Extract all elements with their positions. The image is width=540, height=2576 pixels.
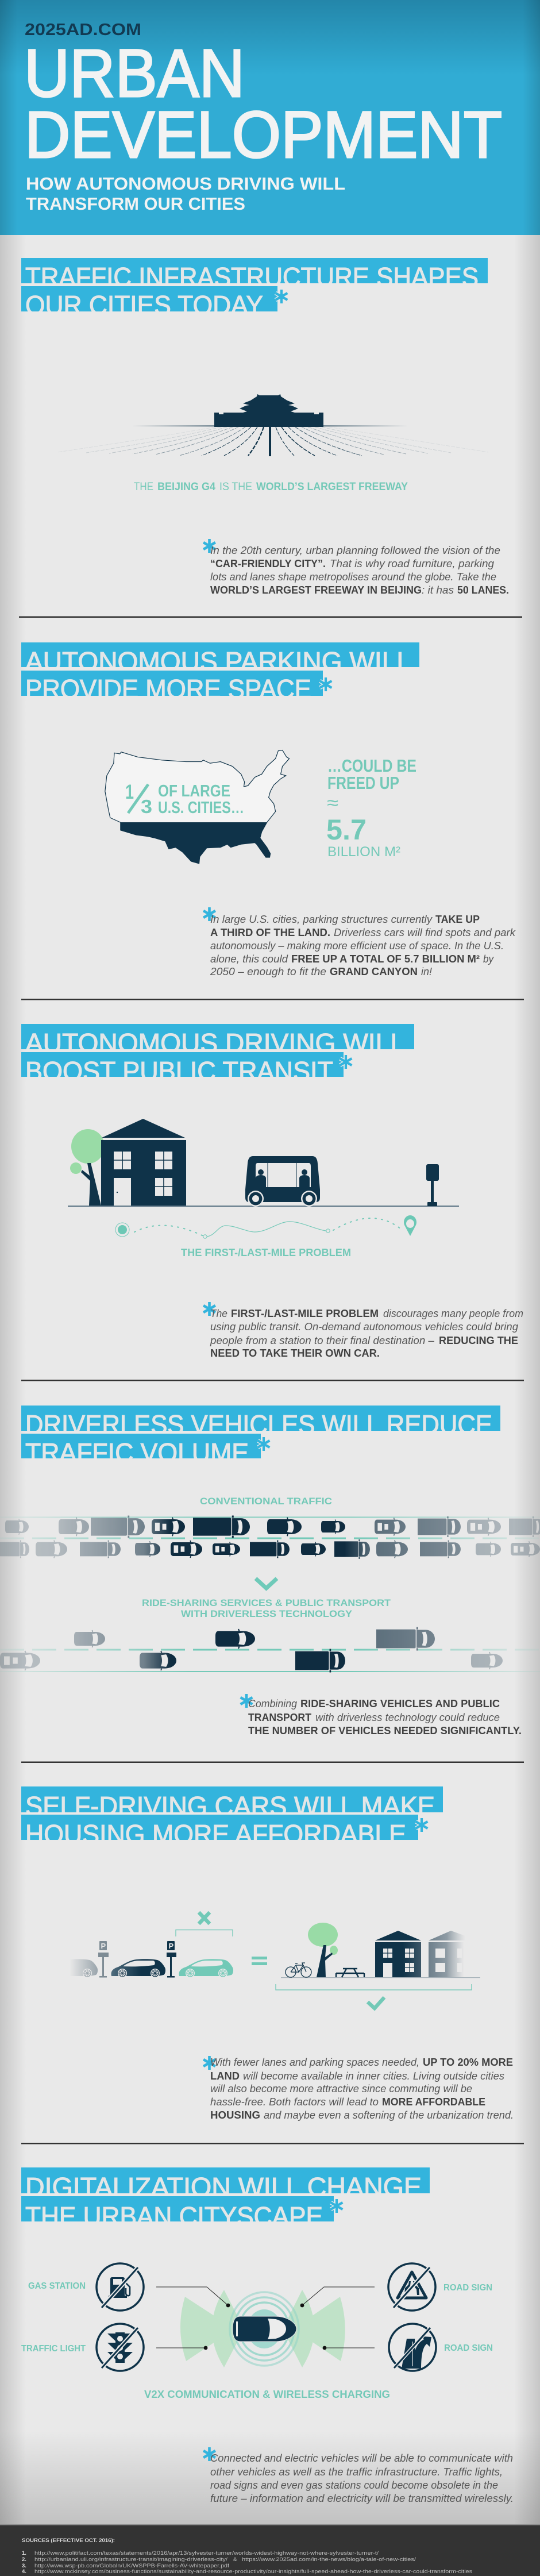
statistic: 5.7 billion m² [326,756,416,860]
footer: sources: 2. [22,2556,26,2563]
caption: Beijing G4: THE [134,481,153,493]
heading: autonomous parking: AUTONOMOUS PARKING WILL [25,646,411,676]
heading: digitalization: DIGITALIZATION WILL CHANGE [25,2172,422,2202]
text block: parking structures: by [483,953,494,965]
route diagram: first and last mile [115,1215,416,1238]
text block: ride-sharing vehicles: RIDE-SHARING VEHICLES AND PUBLIC [300,1698,500,1709]
text block: affordable housing: hassle-free. Both factors will lead to [210,2096,379,2108]
header banner: HOW AUTONOMOUS DRIVING WILL [26,174,345,194]
heading: autonomous parking [21,642,419,696]
statistic: 5.7 billion m²: FREED UP [327,773,399,793]
text block: first/last mile: The [210,1308,227,1319]
label: road sign lower: ROAD SIGN [444,2343,493,2353]
icon: crossed-out road sign fork [389,2324,436,2371]
text block: parking structures: in! [421,966,432,977]
footer: sources: http://www.mckinsey.com/business-functions/sustainability-and-resource-productivity/our-insights/full-speed-ahead-how-the-driverless-car-could-transform-cities [34,2569,472,2575]
icon: crossed-out road sign narrowing [388,2263,435,2311]
map: United States with one third shaded: OF LARGE [158,782,230,800]
footer: sources: 4. [22,2569,26,2575]
text block: affordable housing: will become available in inner cities. Living outside cities [243,2070,504,2082]
footer: sources: http://urbanland.uli.org/infrastructure-transit/imagining-driverless-city/ [34,2556,227,2563]
vehicle with V2X signal waves and wireless charging [180,2290,345,2367]
footer: sources: & [233,2556,237,2563]
text block: connected vehicles [203,2447,514,2504]
heading: public transit [21,1024,414,1077]
heading: traffic volume: DRIVERLESS VEHICLES WILL REDUCE [25,1410,492,1439]
text block: affordable housing: LAND [210,2070,240,2082]
illustration: parked cars [44,1912,233,1978]
heading: public transit: AUTONOMOUS DRIVING WILL [25,1028,405,1058]
heading: traffic infrastructure [21,258,488,311]
text block: first/last mile: people from a station to their final destination – [210,1335,435,1346]
text block: connected vehicles: road signs and even gas stations could become obsolete in the [210,2479,498,2491]
illustration: freed land with bike, tree, picnic table and housing [276,1923,480,2008]
text block: car-friendly city: WORLD’S LARGEST FREEWAY IN BEIJING [210,584,422,596]
text block: affordable housing [203,2056,514,2121]
text block: car-friendly city: That is why road furniture, parking [330,558,494,569]
heading: traffic infrastructure: OUR CITIES TODAY [25,290,263,320]
text block: affordable housing: MORE AFFORDABLE [382,2096,485,2108]
caption: Beijing G4: WORLD’S LARGEST FREEWAY [256,481,408,493]
text block: car-friendly city: “CAR-FRIENDLY CITY”. [210,558,326,569]
footer: sources: SOURCES (EFFECTIVE OCT. 2016): [22,2538,115,2544]
statistic: 5.7 billion m²: BILLION M² [327,844,400,860]
caption: ride-sharing [142,1597,391,1619]
heading: autonomous parking: PROVIDE MORE SPACE [25,674,311,704]
text block: first/last mile: using public transit. On-demand autonomous vehicles could bring [210,1321,518,1333]
header banner [0,0,540,235]
text block: car-friendly city: : it has [422,584,454,596]
caption: first/last-mile problem: THE FIRST-/LAST-MILE PROBLEM [181,1247,351,1258]
label: traffic light: TRAFFIC LIGHT [21,2344,86,2354]
heading: digitalization: THE URBAN CITYSCAPE [25,2201,323,2231]
text block: affordable housing: UP TO 20% MORE [423,2057,513,2068]
header banner: DEVELOPMENT [25,98,502,172]
heading: traffic volume [21,1406,500,1458]
statistic: 5.7 billion m²: ≈ [327,792,338,813]
text block: connected vehicles: Connected and electric vehicles will be able to communicate with [210,2452,513,2464]
footer: sources [0,2524,540,2576]
caption: ride-sharing: RIDE-SHARING SERVICES & PUBLIC TRANSPORT [142,1597,391,1608]
map: United States with one third shaded: U.S. CITIES… [158,799,244,817]
text block: parking structures: autonomously – making more efficient use of space. In the U.S. [210,940,504,952]
map: United States with one third shaded: 3 [141,796,152,817]
road: reduced traffic with fewer vehicles [0,1627,540,1672]
map: United States with one third shaded [105,749,290,864]
text block: first/last mile [203,1302,523,1359]
text block: parking structures: Driverless cars will find spots and park [334,927,516,938]
text block: affordable housing: and maybe even a softening of the urbanization trend. [264,2109,514,2121]
text block: connected vehicles: future – information and electricity will be transmitted wirelessly. [210,2493,514,2504]
text block: car-friendly city [203,539,509,596]
text block: parking structures: A THIRD OF THE LAND. [210,927,330,938]
text block: parking structures: 2050 – enough to fit the [210,966,326,977]
text block: ride-sharing vehicles: Combining [248,1698,297,1709]
text block: first/last mile: NEED TO TAKE THEIR OWN CAR. [210,1347,380,1359]
text block: parking structures: FREE UP A TOTAL OF 5.7 BILLION M² [291,953,480,965]
text block: ride-sharing vehicles [241,1694,522,1736]
header banner: TRANSFORM OUR CITIES [26,194,245,214]
heading: traffic volume: TRAFFIC VOLUME [25,1438,249,1468]
illustration: parked cars: P [169,1942,173,1950]
text block: connected vehicles: other vehicles as well as the traffic infrastructure. Traffic lights, [210,2466,503,2478]
text block: parking structures: alone, this could [210,953,288,965]
text block: parking structures: GRAND CANYON [330,966,418,977]
header banner: URBAN [24,36,245,111]
caption: V2X communication: V2X COMMUNICATION & WIRELESS CHARGING [144,2389,390,2400]
road: conventional traffic with many vehicles [0,1516,540,1559]
text block: ride-sharing vehicles: TRANSPORT [248,1712,311,1723]
text block: affordable housing: HOUSING [210,2109,260,2121]
caption: Beijing G4 [134,481,408,493]
text block: car-friendly city: In the 20th century, urban planning followed the vision of the [210,545,500,556]
header banner: 2025AD.COM [25,21,141,39]
text block: ride-sharing vehicles: with driverless technology could reduce [315,1712,500,1723]
text block: first/last mile: REDUCING THE [439,1335,518,1346]
text block: affordable housing: will also become more attractive since commuting will be [210,2083,472,2094]
caption: conventional traffic: CONVENTIONAL TRAFFIC [200,1496,332,1507]
caption: Beijing G4: BEIJING G4 [157,481,215,493]
statistic: 5.7 billion m²: …COULD BE [327,756,416,776]
text block: affordable housing: With fewer lanes and parking spaces needed, [210,2057,419,2068]
footer: sources: 3. [22,2563,26,2569]
heading: affordable housing: SELF-DRIVING CARS WILL MAKE [25,1791,435,1821]
footer: sources: https://www.2025ad.com/in-the-news/blog/a-tale-of-new-cities/ [242,2556,416,2563]
text block: car-friendly city: lots and lanes shape metropolises around the globe. Take the [210,571,496,583]
label: gas station: GAS STATION [28,2281,86,2291]
connector lines with dots [156,2287,375,2350]
text block: parking structures: In large U.S. cities, parking structures currently [210,914,433,925]
label: road sign upper: ROAD SIGN [443,2283,492,2293]
icon: crossed-out traffic light [97,2324,144,2371]
caption: ride-sharing: WITH DRIVERLESS TECHNOLOGY [181,1608,353,1619]
street scene: house, tree, shuttle and stop [68,1119,459,1207]
text block: ride-sharing vehicles: THE NUMBER OF VEHICLES NEEDED SIGNIFICANTLY. [248,1725,522,1736]
heading: affordable housing [21,1786,443,1840]
statistic: 5.7 billion m²: 5.7 [326,814,367,846]
heading: digitalization [21,2167,430,2221]
text block: parking structures: TAKE UP [435,914,480,925]
footer: sources: 1. [22,2550,26,2556]
equals sign [252,1957,267,1965]
icon: crossed-out gas station [97,2263,144,2311]
footer: sources: http://www.wsp-pb.com/Globaln/UK/WSPPB-Farrells-AV-whitepaper.pdf [34,2563,229,2569]
text block: parking structures [203,907,516,977]
Beijing gate and freeway illustration [57,394,488,456]
caption: Beijing G4: IS THE [219,481,252,493]
arrow: chevron down [256,1578,277,1588]
text block: first/last mile: FIRST-/LAST-MILE PROBLEM [231,1308,379,1319]
text block: first/last mile: discourages many people from [383,1308,523,1319]
text block: car-friendly city: 50 LANES. [457,584,509,596]
heading: traffic infrastructure: TRAFFIC INFRASTRUCTURE SHAPES [25,262,479,292]
map: United States with one third shaded: 1 [125,781,134,803]
footer: sources: http://www.politifact.com/texas/statements/2016/apr/13/sylvester-turner/worlds-widest-highway-not-where-sylvester-turner-t/ [34,2550,379,2556]
heading: public transit: BOOST PUBLIC TRANSIT [25,1056,333,1086]
illustration: parked cars: P [101,1942,106,1950]
heading: affordable housing: HOUSING MORE AFFORDABLE [25,1819,406,1849]
